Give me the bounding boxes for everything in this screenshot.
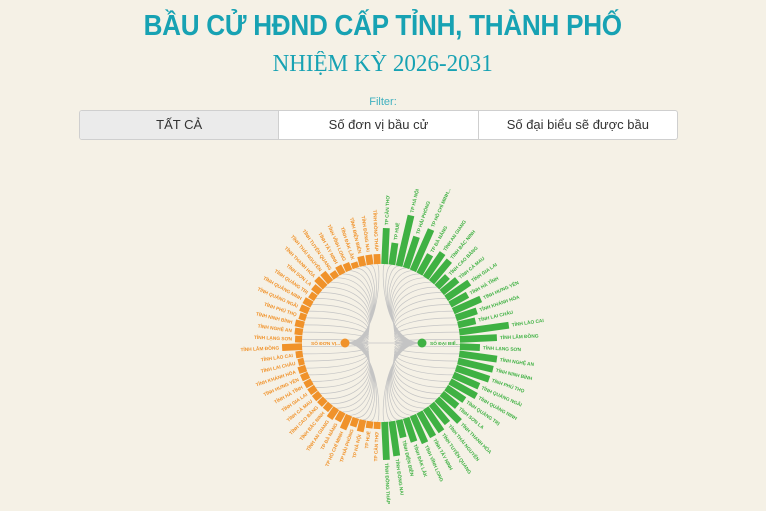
- orange bars: số đơn vị bầu cử: TỈNH ĐIỆN BIÊN: [348, 217, 364, 255]
- green bars: số đại biểu: TP HÀ NỘI: [408, 187, 421, 213]
- orange bars: số đơn vị bầu cử: TỈNH QUẢNG TRỊ: [273, 268, 310, 296]
- green bars: số đại biểu: TỈNH AN GIANG: [442, 219, 468, 253]
- orange bars: số đơn vị bầu cử: TỈNH NINH BÌNH: [255, 309, 294, 326]
- green bars: số đại biểu: TỈNH PHÚ THỌ: [491, 377, 526, 395]
- orange bars: số đơn vị bầu cử: TỈNH HƯNG YÊN: [262, 375, 301, 398]
- orange bars: số đơn vị bầu cử: TỈNH QUẢNG NGÃI: [256, 286, 300, 310]
- orange bars: số đơn vị bầu cử: TỈNH ĐỒNG THÁP: [371, 210, 380, 252]
- green bars: số đại biểu: TỈNH HƯNG YÊN: [482, 278, 520, 301]
- orange bars: số đơn vị bầu cử: TỈNH TÂY NINH: [316, 231, 340, 266]
- green bars: số đại biểu: TỈNH BẮC NINH: [448, 228, 477, 261]
- green bars: số đại biểu: TỈNH GIA LAI: [470, 261, 499, 284]
- orange bars: số đơn vị bầu cử: TỈNH THANH HÓA: [283, 244, 318, 280]
- green bars: số đại biểu: TP HUẾ: [392, 221, 402, 241]
- orange node: [311, 338, 350, 348]
- orange bars: số đơn vị bầu cử: TỈNH ĐỒNG NAI: [360, 215, 372, 253]
- orange bars: số đơn vị bầu cử: TỈNH THÁI NGUYÊN: [289, 233, 325, 273]
- orange bars: số đơn vị bầu cử: TỈNH LAI CHÂU: [260, 360, 297, 375]
- orange bars: số đơn vị bầu cử: TP HỒ CHÍ MINH: [323, 430, 345, 468]
- orange bars: số đơn vị bầu cử: TP HÀ NỘI: [350, 433, 363, 459]
- orange bars: số đơn vị bầu cử: TỈNH NGHỆ AN: [257, 322, 293, 334]
- connector curves: [302, 264, 460, 422]
- green bars: số đại biểu: TỈNH CÀ MAU: [457, 255, 487, 281]
- orange bars: số đơn vị bầu cử: TỈNH BẮC NINH: [297, 409, 327, 442]
- green bars: số đại biểu: TP HỒ CHÍ MINH...: [428, 187, 453, 228]
- filter buttons: Số đại biểu sẽ được bầu: [507, 117, 649, 132]
- green node: SỐ ĐẠI BIỂ...: [430, 340, 460, 347]
- orange bars: số đơn vị bầu cử: TỈNH LẠNG SƠN: [254, 334, 293, 343]
- orange bars: số đơn vị bầu cử: TỈNH GIA LAI: [280, 391, 309, 414]
- green bars: số đại biểu: TỈNH QUẢNG NINH: [477, 395, 519, 422]
- green bars: số đại biểu: TỈNH CAO BẰNG: [447, 244, 480, 277]
- green bars: số đại biểu: TỈNH ĐIỆN BIÊN: [400, 439, 417, 478]
- green bars: số đại biểu: TỈNH NINH BÌNH: [495, 366, 534, 382]
- orange bars: số đơn vị bầu cử: TỈNH QUẢNG NINH: [262, 275, 304, 302]
- green bars: số đại biểu: TỈNH LAI CHÂU: [478, 309, 514, 324]
- subtitle: NHIỆM KỲ 2026-2031: [273, 51, 493, 77]
- green bars: số đại biểu: TỈNH QUẢNG NGÃI: [480, 384, 524, 409]
- orange bars: số đơn vị bầu cử: TỈNH VĨNH LONG: [325, 223, 348, 262]
- orange node: SỐ ĐƠN VỊ...: [311, 340, 340, 347]
- orange bars: số đơn vị bầu cử: TP ĐÀ NẴNG: [319, 422, 340, 451]
- filter buttons: [79, 110, 678, 140]
- orange bars: số đơn vị bầu cử: TỈNH PHÚ THỌ: [263, 301, 298, 318]
- orange bars: số đơn vị bầu cử: TỈNH CAO BẰNG: [287, 403, 320, 437]
- filter buttons: TẤT CẢ: [156, 117, 202, 132]
- green bars: số đại biểu: TỈNH VĨNH LONG: [423, 444, 445, 483]
- orange bars: số đơn vị bầu cử: TỈNH SƠN LA: [285, 263, 314, 288]
- green bars: số đại biểu: TỈNH TÂY NINH: [431, 437, 455, 472]
- green bars: số đại biểu: TỈNH LÂM ĐỒNG: [500, 332, 539, 341]
- green bars: số đại biểu: TỈNH ĐẮK LẮK: [411, 443, 430, 478]
- green bars: số đại biểu: TỈNH THÁI NGUYÊN: [447, 423, 482, 463]
- orange bars: số đơn vị bầu cử: TP HẢI PHÒNG: [337, 428, 356, 463]
- filter buttons: Số đơn vị bầu cử: [329, 117, 428, 132]
- orange bars: số đơn vị bầu cử: TỈNH TUYÊN QUANG: [301, 228, 334, 272]
- green bars: số đại biểu: TP CẦN THƠ: [383, 195, 392, 225]
- green bars: số đại biểu: TP ĐÀ NẴNG: [429, 224, 449, 254]
- green bars: số đại biểu: TỈNH QUẢNG TRỊ: [465, 399, 502, 427]
- green bars: số đại biểu: TP HẢI PHÒNG: [413, 200, 432, 235]
- green bars: số đại biểu: TỈNH ĐỒNG THÁP: [383, 463, 392, 505]
- orange bars: số đơn vị bầu cử: TP CẦN THƠ: [372, 431, 381, 462]
- orange bars: số đơn vị bầu cử: [240, 210, 381, 468]
- orange bars: số đơn vị bầu cử: TP HUẾ: [363, 430, 372, 449]
- green node: [418, 338, 460, 348]
- orange bars: số đơn vị bầu cử: TỈNH AN GIANG: [305, 418, 331, 453]
- orange bars: số đơn vị bầu cử: TỈNH LÀO CAI: [260, 352, 294, 363]
- green bars: số đại biểu: TỈNH LÀO CAI: [511, 317, 545, 328]
- orange bars: số đơn vị bầu cử: TỈNH LÂM ĐỒNG: [240, 344, 280, 353]
- orange bars: số đơn vị bầu cử: TỈNH KHÁNH HÒA: [255, 367, 297, 388]
- orange bars: số đơn vị bầu cử: TỈNH ĐẮK LẮK: [339, 226, 357, 261]
- green bars: số đại biểu: TỈNH THANH HÓA: [459, 421, 494, 456]
- filter label: Filter:: [369, 96, 397, 108]
- orange bars: số đơn vị bầu cử: TỈNH CÀ MAU: [285, 398, 315, 424]
- green bars: số đại biểu: TỈNH TUYÊN QUANG: [440, 431, 474, 476]
- green bars: số đại biểu: TỈNH HÀ TĨNH: [469, 275, 500, 297]
- green bars: số đại biểu: TỈNH ĐỒNG NAI: [393, 458, 406, 496]
- green bars: số đại biểu: [381, 187, 545, 505]
- green bars: số đại biểu: TỈNH LẠNG SƠN: [483, 344, 522, 353]
- green bars: số đại biểu: TỈNH KHÁNH HÒA: [478, 292, 521, 313]
- title: BẦU CỬ HĐND CẤP TỈNH, THÀNH PHỐ: [144, 10, 622, 42]
- green bars: số đại biểu: TỈNH NGHỆ AN: [499, 355, 535, 368]
- orange bars: số đơn vị bầu cử: TỈNH HÀ TĨNH: [273, 384, 305, 406]
- green bars: số đại biểu: TỈNH SƠN LA: [457, 406, 486, 431]
